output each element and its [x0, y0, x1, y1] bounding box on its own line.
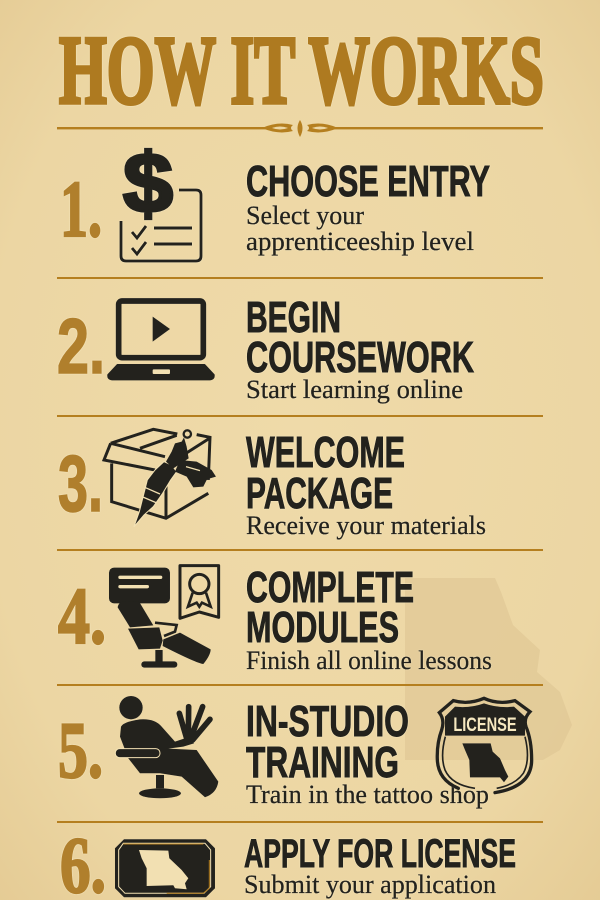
icon: box with tattoo machine [104, 429, 216, 527]
number 1: 1. [60, 166, 102, 254]
description: step 1: Select your [246, 201, 364, 230]
watermark: Missouri silhouette [405, 578, 572, 760]
heading: complete modules [246, 563, 414, 652]
description: step 5: Train in the tattoo shop [246, 780, 489, 809]
heading: welcome package: PACKAGE [246, 469, 393, 518]
heading: choose entry: CHOOSE ENTRY [246, 157, 490, 206]
heading: in-studio training: TRAINING [246, 738, 399, 787]
icon: Missouri license plate [115, 839, 215, 897]
step 5 [58, 696, 532, 809]
description: step 6: Submit your application [244, 870, 496, 899]
badge: license shield: LICENSE [453, 715, 517, 736]
heading: welcome package: WELCOME [246, 428, 405, 477]
icon: laptop with play button [108, 301, 214, 380]
description: step 2: Start learning online [246, 375, 463, 404]
heading: in-studio training [246, 697, 409, 787]
number 5: 5. [58, 707, 103, 795]
step 1 [60, 136, 490, 261]
heading: welcome package [246, 428, 405, 518]
badge: license shield [437, 698, 532, 793]
step 2 [57, 293, 474, 404]
heading: complete modules: MODULES [246, 603, 399, 652]
icon: dollar and checklist: $ [123, 136, 173, 230]
icon: client in tattoo chair [115, 696, 218, 798]
heading: begin coursework: COURSEWORK [246, 333, 474, 382]
description: step 3: Receive your materials [246, 511, 486, 540]
heading: complete modules: COMPLETE [246, 563, 414, 612]
number 4: 4. [58, 573, 106, 661]
description: step 1 [246, 201, 474, 256]
heading: begin coursework: BEGIN [246, 293, 341, 342]
description: step 1: apprenticeeship level [246, 227, 474, 256]
icon: chat, certificate and chair [109, 566, 219, 668]
step 6 [60, 822, 516, 900]
number 3: 3. [58, 439, 103, 528]
divider: title ornament [57, 120, 543, 137]
step 4 [58, 563, 492, 675]
step 3 [58, 428, 486, 540]
description: step 4: Finish all online lessons [246, 646, 492, 675]
heading: in-studio training: IN-STUDIO [246, 697, 409, 746]
icon: dollar and checklist [121, 136, 201, 261]
number 2: 2. [57, 302, 105, 390]
heading: begin coursework [246, 293, 474, 382]
